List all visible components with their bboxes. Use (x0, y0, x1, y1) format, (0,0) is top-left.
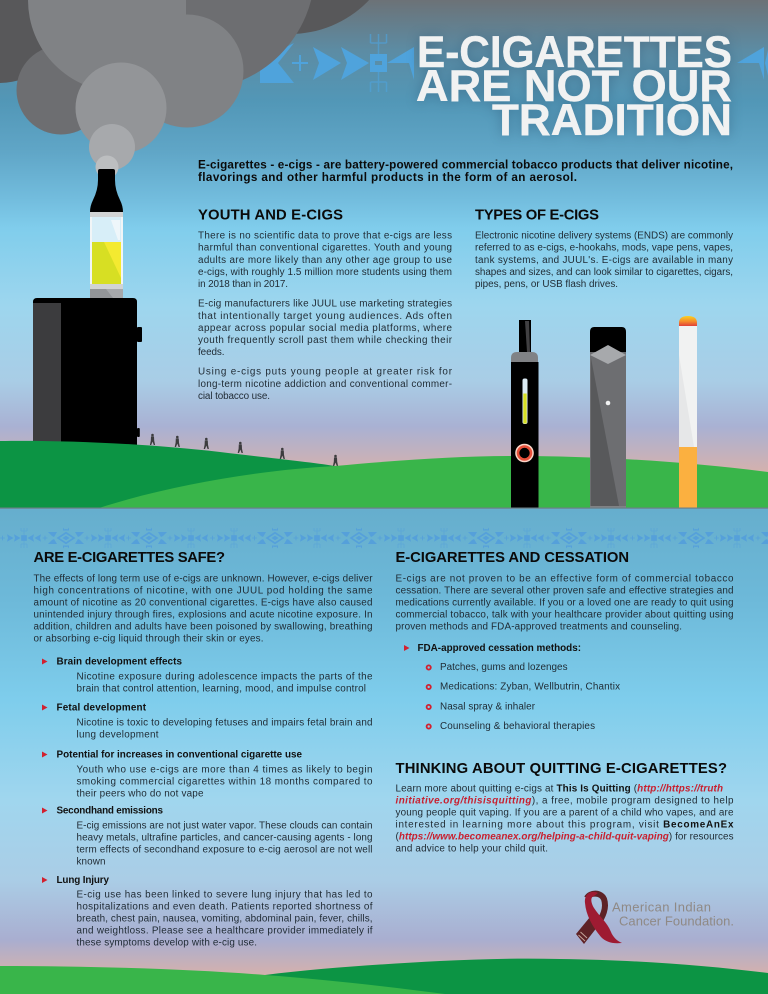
text: quitting paragraph: (https://www.becomeanex.org/helping-a-child-quit-vaping) for resources (396, 832, 734, 843)
section divider line (0, 508, 768, 509)
text: quitting paragraph (396, 784, 734, 855)
bullet: potential for increases: Youth who use e-cigs are more than 4 times as likely to begin (76, 764, 372, 775)
text: safety paragraph (34, 574, 373, 645)
intro text: flavorings and other harmful products in the form of an aerosol. (198, 171, 577, 184)
intro text (198, 158, 733, 184)
smoke cloud (0, 0, 399, 178)
text: youth paragraph 1 (198, 231, 452, 290)
logo: american indian cancer foundation: American Indian (612, 900, 711, 915)
intro text: E-cigarettes - e-cigs - are battery-powered commercial tobacco products that deliver nicotine, (198, 158, 733, 172)
bullet: brain development: brain that control attention, learning, mood, and impulse control (76, 684, 366, 694)
text: youth paragraph 2: E-cig manufacturers like JUUL use marketing strategies (198, 299, 452, 310)
text: cessation paragraph: commercial tobacco, talk with your healthcare provider about quitting using (396, 610, 734, 621)
list: cessation methods (440, 662, 620, 732)
text: types of e-cigs: referred to as e-cigs, e-hookahs, mods, vape pens, vapes, (475, 243, 733, 254)
text: safety paragraph: amount of nicotine as 20 conventional cigarettes. E-cigs have also caused (34, 598, 372, 609)
title (416, 28, 732, 145)
list: cessation methods: Patches, gums and lozenges (440, 662, 568, 673)
logo: american indian cancer foundation (576, 892, 734, 944)
bullet: fda-approved methods: FDA-approved cessation methods: (418, 643, 581, 654)
title: ARE NOT OUR (416, 62, 732, 111)
text: youth paragraph 1: e-cigs, with roughly 1.5 million more students using them (198, 267, 452, 278)
text: youth paragraph 2: appear across popular social media platforms, where (198, 323, 452, 334)
list: cessation methods: Medications: Zyban, Wellbutrin, Chantix (440, 682, 620, 692)
text: youth paragraph 3: long-term nicotine addiction and conventional commer- (198, 379, 452, 390)
bullet: lung injury: breath, chest pain, nausea, vomiting, abdominal pain, fever, chills, (76, 914, 372, 925)
bullet: secondhand emissions: heavy metals, ultrafine particles, and cancer-causing agents - long (76, 832, 372, 844)
bullet: secondhand emissions: term effects of secondhand exposure to e-cig aerosol are not well (76, 845, 372, 856)
text: quitting paragraph: initiative.org/thisisquitting), a free, mobile program designed to help (396, 796, 734, 806)
heading: thinking about quitting: THINKING ABOUT QUITTING E-CIGARETTES? (396, 761, 727, 777)
text: youth paragraph 3: Using e-cigs puts young people at greater risk for (198, 367, 453, 378)
bullet: brain development (56, 656, 373, 694)
top sky background (0, 0, 768, 508)
text: cessation paragraph (396, 574, 734, 633)
logo: ribbon mark (576, 892, 622, 944)
bullet: brain development: Nicotine exposure during adolescence impacts the parts of the (76, 672, 373, 682)
text: cessation paragraph: E-cigs are not proven to be an effective form of commercial tobacco (396, 574, 734, 584)
bullet: potential for increases (56, 750, 373, 799)
icon: pod style e-cig (590, 327, 626, 508)
logo: american indian cancer foundation: Cancer Foundation. (619, 914, 734, 929)
title: E-CIGARETTES (417, 28, 732, 77)
text: cessation paragraph: cessation. There are several other proven safe and effective strategies and (396, 586, 734, 596)
bullet: potential for increases: their peers who do not vape (76, 788, 204, 799)
heading: youth and e-cigs: YOUTH AND E-CIGS (198, 208, 343, 224)
bullet: secondhand emissions (56, 806, 372, 868)
people walking on hill (150, 434, 338, 466)
text: youth paragraph 2: youth frequently scroll past them while checking their (198, 335, 453, 346)
text: types of e-cigs: pipes, pens, or USB flash drives. (475, 279, 618, 290)
bullet: fetal development: Fetal development (56, 702, 147, 714)
text: youth paragraph 2: that intentionally target young audiences. Ads often (198, 311, 452, 322)
text: youth paragraph 2 (198, 299, 453, 358)
bullet: potential for increases: smoking commercial cigarettes within 18 months compared to (76, 776, 373, 787)
text: types of e-cigs: tank systems, and JUUL's. E-cigs are available in many (475, 255, 733, 266)
bullet: lung injury: hospitalizations and even death. Patients reported shortness of (76, 902, 373, 912)
text: youth paragraph 1: adults are more likely than any other age group to use (198, 255, 452, 266)
text: safety paragraph: The effects of long term use of e-cigs are unknown. However, e-cigs deliver (34, 574, 373, 584)
text: youth paragraph 3 (198, 367, 453, 402)
bullet: secondhand emissions: Secondhand emissions (56, 806, 164, 817)
text: youth paragraph 1: in 2018 than in 2017. (198, 279, 288, 290)
heading: types of e-cigs: TYPES OF E-CIGS (475, 208, 599, 224)
text: youth paragraph 1: There is no scientific data to prove that e-cigs are less (198, 231, 452, 242)
icon: tank vape mod (33, 169, 142, 450)
bullet: fetal development: lung development (76, 730, 159, 740)
bullet: lung injury: these symptoms develop with e-cig use. (76, 938, 257, 949)
list markers (42, 645, 431, 883)
text: safety paragraph: or absorbing e-cig liquid through their skin or eyes. (34, 634, 264, 645)
text: youth paragraph 3: cial tobacco use. (198, 391, 270, 402)
list: cessation methods: Nasal spray & inhaler (440, 702, 536, 712)
text: quitting paragraph: interested in learning more about this program, visit BecomeAnEx (396, 820, 734, 831)
text: cessation paragraph: medications currently available. If you or a loved one are ready to quit using (396, 598, 734, 609)
text: safety paragraph: addition, children and adults have been poisoned by swallowing, breathing (34, 622, 372, 633)
text: quitting paragraph: young people quit vaping. If you are a parent of a child who vapes, and are (396, 808, 734, 819)
heading: e-cigarettes and cessation: E-CIGARETTES AND CESSATION (396, 550, 629, 566)
text: cessation paragraph: proven methods and FDA-approved treatments and counseling. (396, 622, 682, 633)
text: youth paragraph 1: harmful than conventional cigarettes. Youth and young (198, 243, 452, 254)
text: youth paragraph 2: feeds. (198, 347, 224, 358)
bullet: fetal development: Nicotine is toxic to developing fetuses and impairs fetal brain and (76, 718, 372, 728)
icon: conventional cigarette (679, 316, 697, 508)
bullet: lung injury: Lung Injury (56, 875, 110, 886)
bullet: secondhand emissions: E-cig emissions are not just water vapor. These clouds can contain (76, 820, 372, 832)
bullet: fetal development (56, 702, 372, 740)
decorative pattern behind title (260, 34, 768, 92)
bullet: lung injury: E-cig use has been linked to severe lung injury that has led to (76, 890, 373, 900)
text: quitting paragraph: and advice to help your child quit. (396, 844, 548, 855)
heading: are e-cigarettes safe: ARE E-CIGARETTES SAFE? (34, 550, 225, 566)
hills: bottom scene (0, 959, 768, 994)
icon: pen style e-cig (511, 320, 538, 508)
hills: upper scene (0, 441, 768, 508)
title: TRADITION (492, 96, 732, 145)
text: types of e-cigs: shapes and sizes, and can look similar to cigarettes, cigars, (475, 267, 733, 278)
bullet: lung injury (56, 875, 373, 949)
bullet: secondhand emissions: known (76, 857, 106, 868)
text: types of e-cigs (475, 231, 733, 290)
text: quitting paragraph: Learn more about quitting e-cigs at This Is Quitting (http://https://truth (396, 784, 723, 794)
text: safety paragraph: unintended injury through fires, explosions and acute nicotine exposure. In (34, 610, 372, 621)
list: cessation methods: Counseling & behavioral therapies (440, 721, 595, 732)
bullet: brain development: Brain development effects (56, 656, 182, 668)
bullet: lung injury: and weightloss. Please see a healthcare provider immediately if (76, 926, 373, 937)
text: types of e-cigs: Electronic nicotine delivery systems (ENDS) are commonly (475, 231, 733, 242)
bullet: potential for increases: Potential for increases in conventional cigarette use (56, 750, 302, 761)
decorative pattern strip (0, 528, 768, 548)
text: safety paragraph: high concentrations of nicotine, with one JUUL pod holding the same (34, 586, 373, 596)
